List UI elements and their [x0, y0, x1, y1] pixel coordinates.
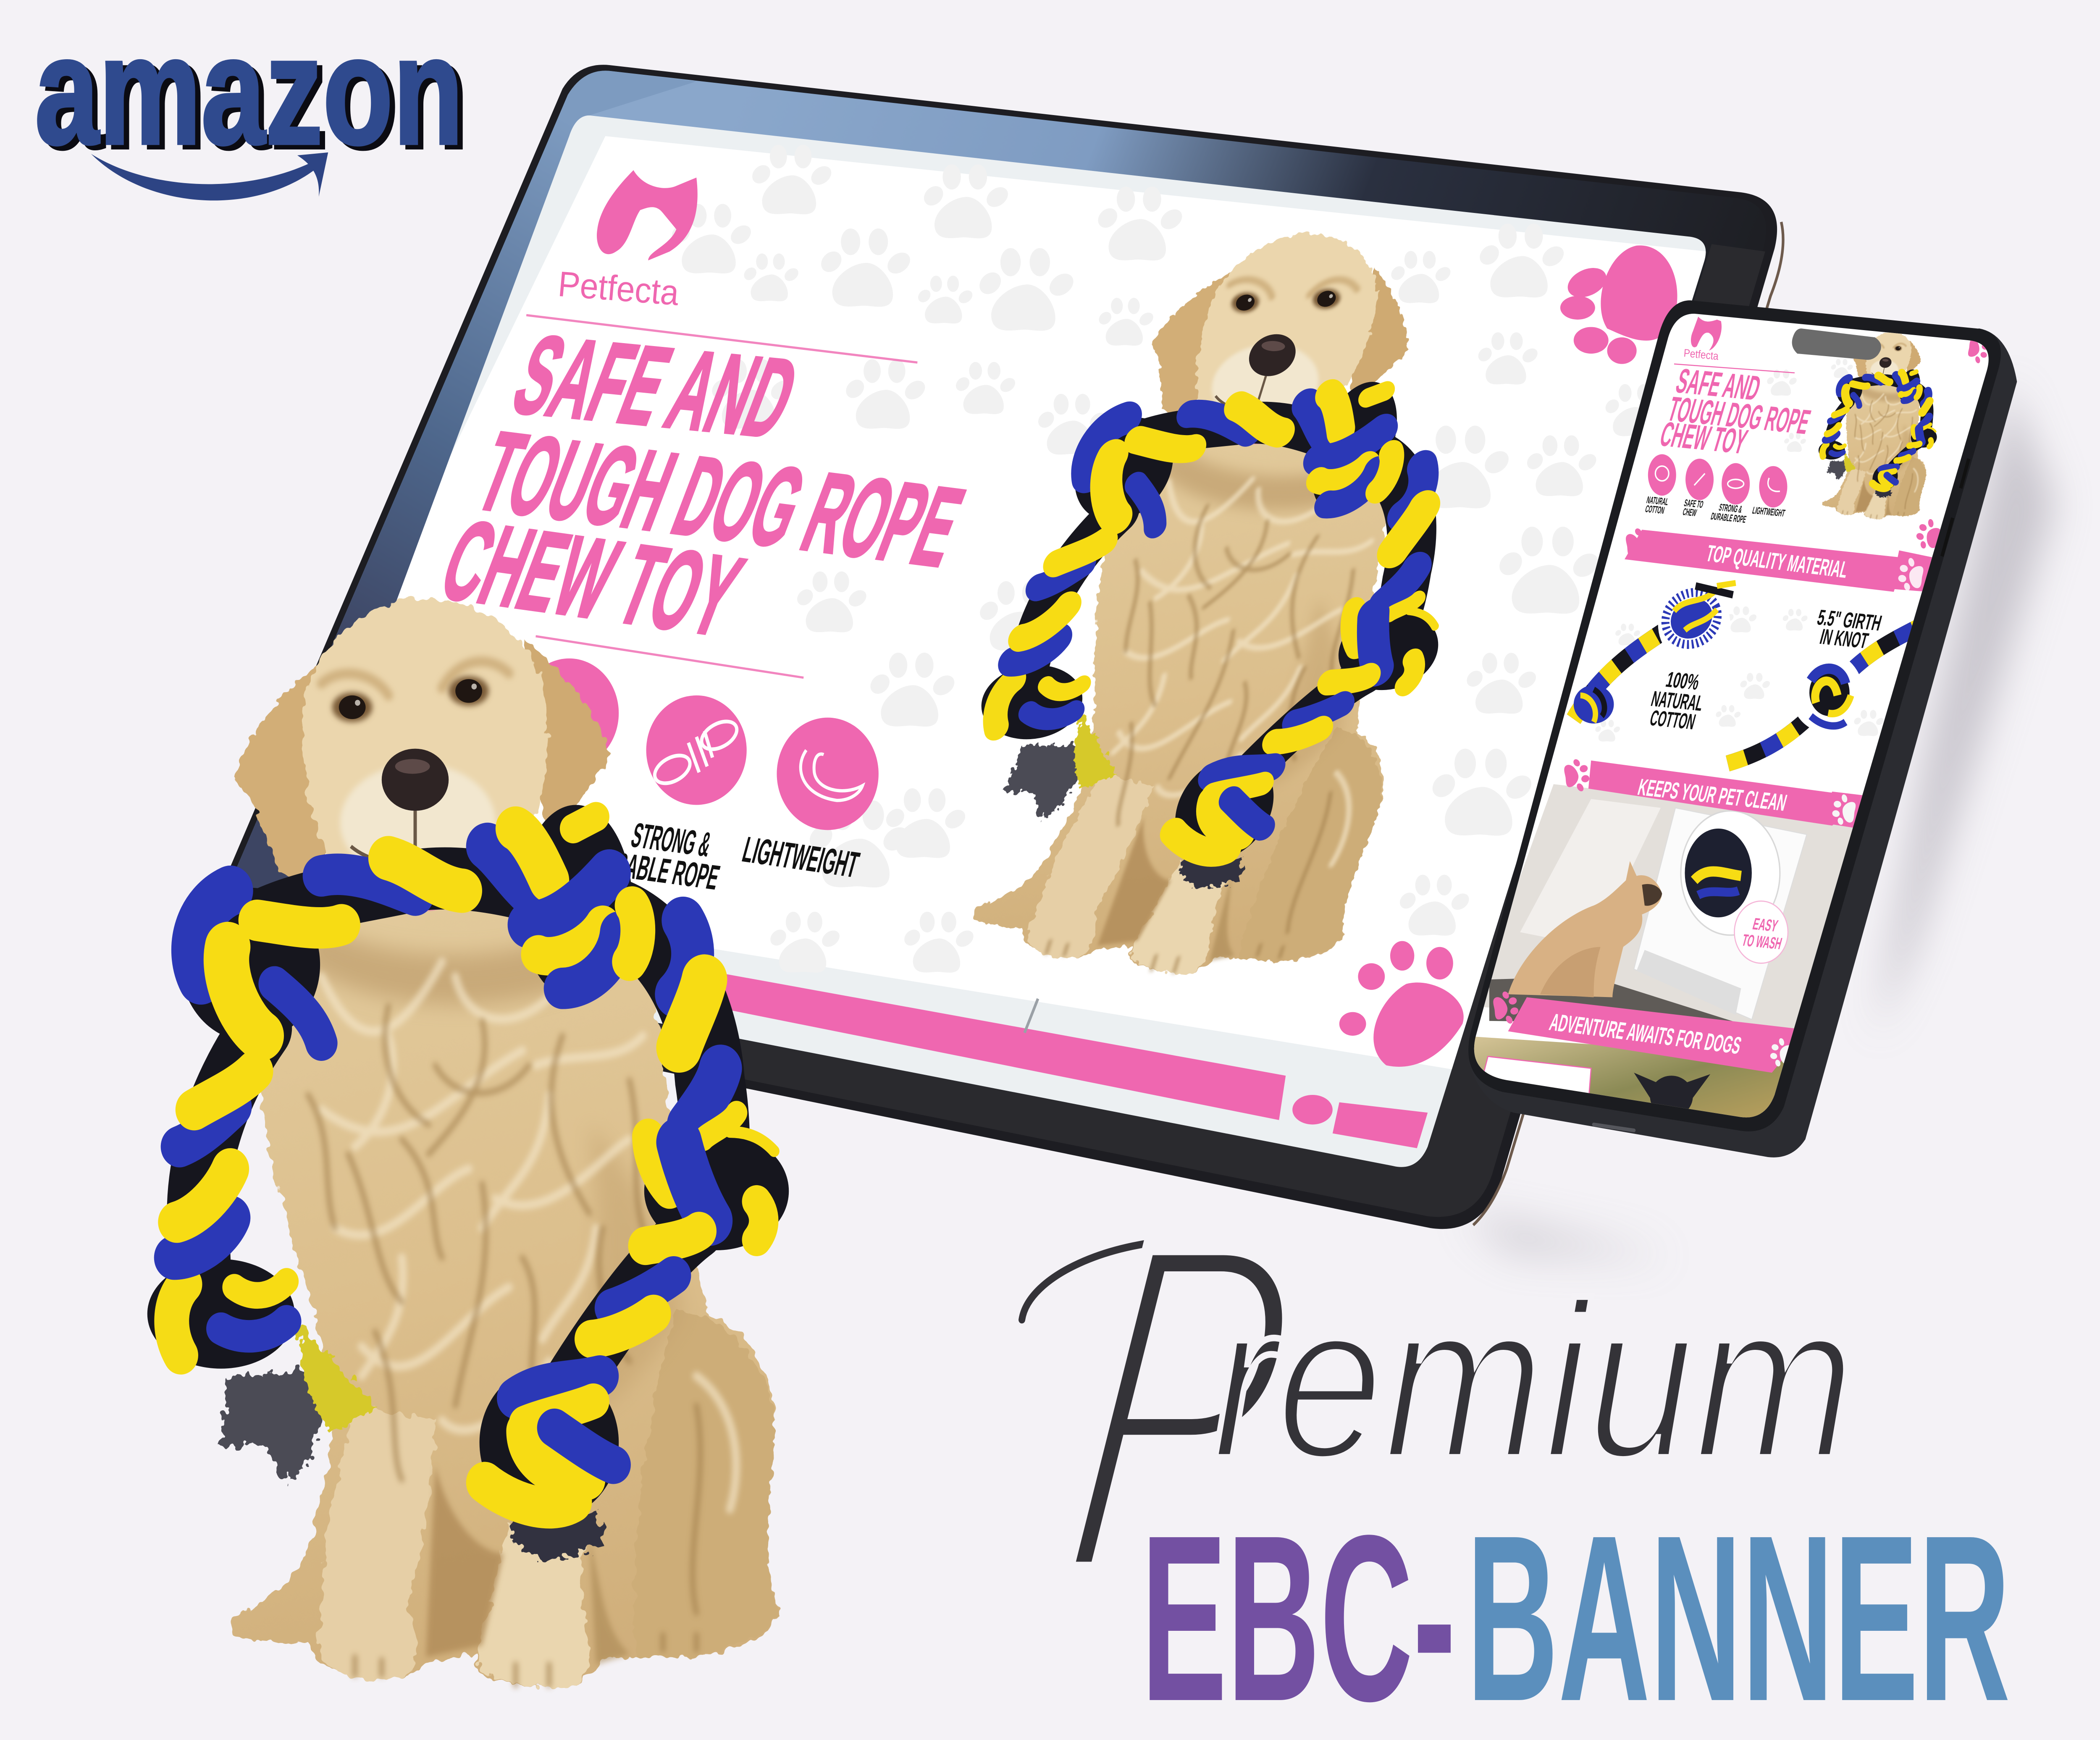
phone heading: SAFE AND: [1672, 361, 1765, 407]
tablet heading: [426, 312, 978, 659]
dynamic island: [1792, 328, 1881, 360]
tablet heading: TOUGH DOG ROPE: [462, 408, 978, 590]
girth label: [1815, 605, 1884, 653]
phone side: [1469, 328, 2017, 1157]
label: lightweight: LIGHTWEIGHT: [738, 829, 863, 885]
label: strong and durable rope: DURABLE ROPE: [587, 842, 724, 897]
phone heading: TOUGH DOG ROPE: [1664, 389, 1814, 441]
banner: keeps your pet clean: KEEPS YOUR PET CLEAN: [1635, 774, 1790, 816]
rope closeup: natural cotton: [1574, 583, 1736, 734]
easy to wash bubble: TO WASH: [1740, 931, 1784, 953]
tablet left bezel: [234, 71, 696, 947]
phone dog with rope: [1805, 328, 1958, 523]
phone icon labels: DURABLE ROPE: [1710, 510, 1748, 525]
divider line: [536, 636, 803, 678]
phone icon labels: CHEW: [1682, 506, 1698, 518]
phone: [1460, 296, 2017, 1157]
tablet rim: [228, 65, 1777, 1229]
banner: adventure awaits: ADVENTURE AWAITS FOR DOGS: [1547, 1008, 1744, 1059]
soft shadows: [1460, 385, 2056, 1258]
script heading: Premium: remium: [1212, 1257, 1855, 1504]
phone icon glyphs: [1655, 466, 1780, 491]
script heading: Premium: [1045, 1142, 1855, 1672]
white content: [248, 136, 1708, 1073]
phone icon labels: [1644, 494, 1786, 525]
amazon smile: [91, 152, 328, 200]
french bulldog: [1508, 861, 1662, 997]
pink paw top right: [1560, 245, 1677, 364]
tablet lower bezel: [268, 244, 1765, 1217]
girth label: 5.5" GIRTH: [1815, 605, 1884, 635]
phone divider: [1674, 364, 1795, 373]
washing machine: [1634, 808, 1807, 1019]
label: strong and durable rope: STRONG &: [627, 815, 716, 864]
phone icon labels: NATURAL: [1646, 494, 1670, 507]
dog head: [1650, 1076, 1693, 1117]
icon: rope: [646, 695, 747, 805]
phone heading: [1656, 361, 1814, 461]
brand logo: [556, 170, 698, 313]
adventure photo: [1460, 1036, 1801, 1139]
laundry photo: [1473, 784, 1875, 1036]
rope label: COTTON: [1647, 706, 1698, 734]
certificate card: [1480, 1056, 1591, 1102]
pink strip end block: [1333, 1102, 1428, 1148]
pink paw bottom right: [1339, 941, 1464, 1067]
phone background paws: [1594, 359, 1911, 742]
banner: keeps your pet clean: [1562, 756, 1870, 829]
easy to wash bubble: [1734, 901, 1788, 963]
banner: top quality material: [1624, 525, 1942, 594]
amazon logo: amazon: [40, 9, 469, 181]
brand name: Petfecta: [556, 264, 680, 313]
rope label: NATURAL: [1649, 686, 1706, 716]
script heading: Premium: P: [1045, 1142, 1315, 1672]
phone logo: [1683, 317, 1722, 362]
tablet: [201, 65, 1783, 1229]
heading: EBC-BANNER: [1141, 1485, 2010, 1740]
tablet heading: CHEW TOY: [426, 497, 757, 659]
tablet screen: [325, 115, 1706, 1167]
rope label: 100%: [1664, 667, 1702, 695]
phone heading: CHEW TOY: [1656, 415, 1752, 461]
strip paw pad: [1292, 1095, 1333, 1124]
phone icon labels: SAFE TO: [1683, 497, 1705, 510]
phone icon labels: COTTON: [1644, 503, 1666, 516]
banner text: TOP QUALITY MATERIAL: [1704, 541, 1851, 583]
pink strip: [710, 974, 1286, 1120]
tablet bezel: [234, 71, 1766, 1217]
script flourish: [1022, 1240, 1192, 1320]
tablet edge highlight: [1473, 222, 1783, 1225]
rope label: [1647, 667, 1706, 734]
divider line: [526, 315, 917, 362]
label: strong and durable rope: [587, 815, 724, 897]
banner: adventure awaits: [1491, 988, 1807, 1073]
phone icon labels: LIGHTWEIGHT: [1751, 504, 1786, 519]
amazon logo: amazon: [35, 5, 463, 176]
machine vent: [1637, 950, 1741, 1015]
tablet heading: SAFE AND: [499, 312, 813, 461]
floor: [1489, 976, 1741, 1024]
easy to wash bubble: EASY: [1751, 915, 1780, 935]
phone brand name: Petfecta: [1683, 347, 1719, 362]
background paws: [669, 145, 1667, 973]
laundry rope: [1694, 871, 1741, 880]
phone corner paws: [1913, 334, 1990, 554]
side buttons: [1942, 459, 1969, 556]
rope closeup: girth: [1728, 605, 1923, 764]
strip divider: [1024, 999, 1038, 1033]
icon: lightweight: [777, 718, 879, 830]
icon: natural cotton: [520, 659, 619, 768]
phone front: [1468, 300, 2001, 1131]
phone feature icons: [1648, 454, 1787, 507]
phone screen: [1460, 296, 2009, 1139]
charging port: [1594, 1124, 1634, 1131]
girth label: IN KNOT: [1817, 624, 1871, 653]
phone icon labels: STRONG &: [1718, 501, 1743, 515]
foreground dog with rope: [147, 599, 789, 1687]
tablet dog with rope: [905, 217, 1559, 988]
